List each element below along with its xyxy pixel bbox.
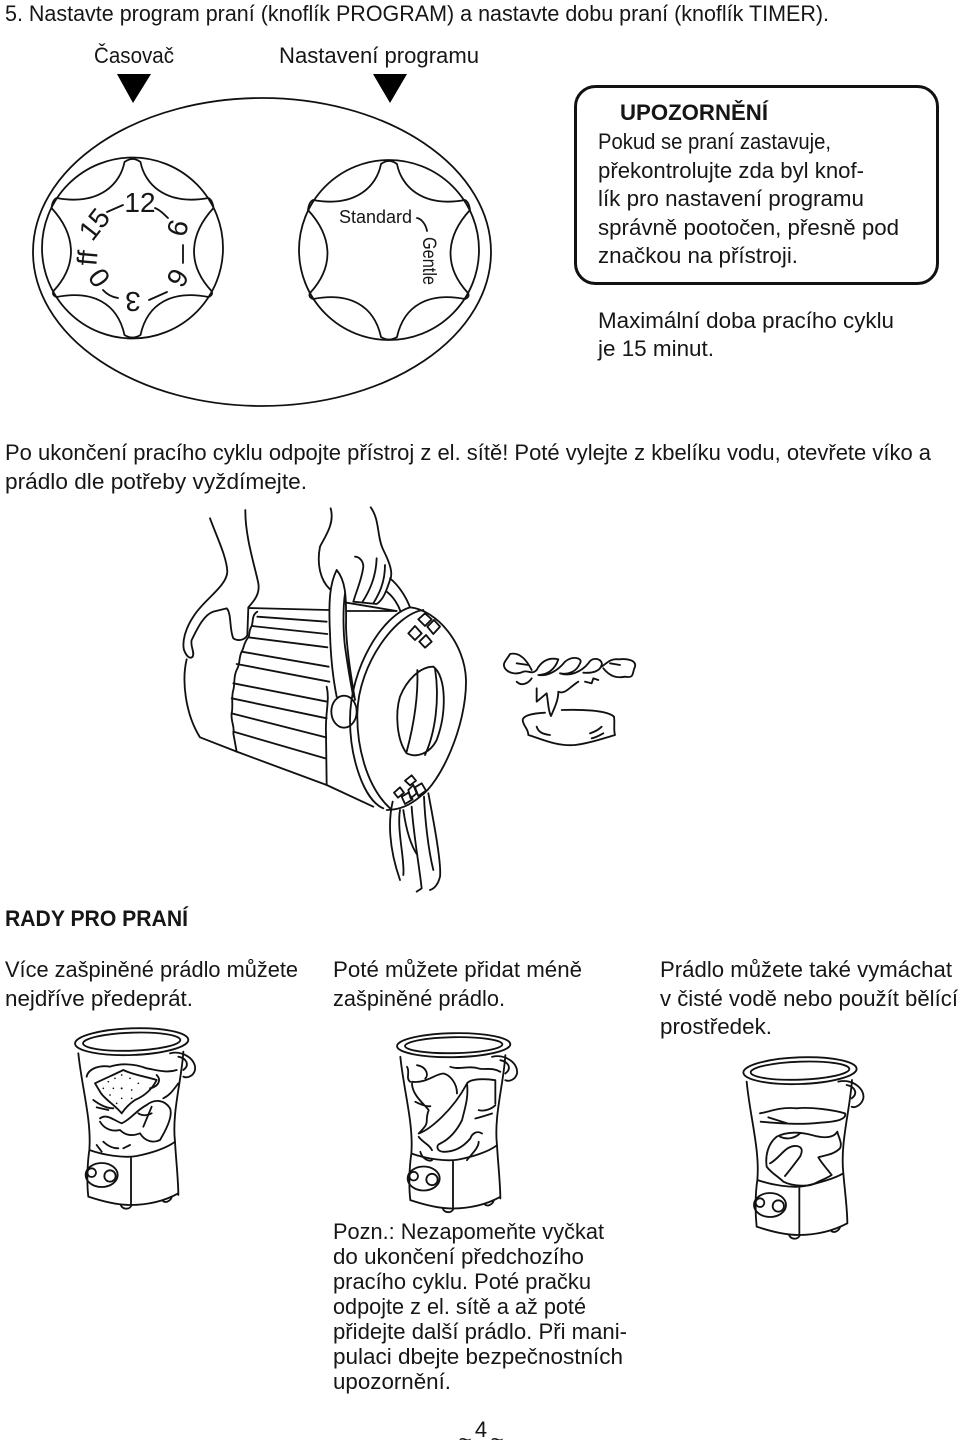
program dial: Standard xyxy=(339,207,412,227)
heading: washing tips: RADY PRO PRANÍ xyxy=(5,906,189,931)
callout body: překontrolujte zda byl knof- xyxy=(598,158,864,183)
instruction after washing xyxy=(5,440,932,494)
tip 1 text: nejdříve předeprát. xyxy=(5,986,193,1011)
illustration: hands emptying the washer xyxy=(183,507,635,892)
tip 3 text: v čisté vodě nebo použít bělící xyxy=(660,986,958,1011)
safety note: odpojte z el. sítě a až poté xyxy=(333,1294,586,1319)
safety note: do ukončení předchozího xyxy=(333,1244,584,1269)
illustration: wrung laundry xyxy=(504,654,635,745)
maximum cycle note: je 15 minut. xyxy=(597,336,714,361)
safety note: Pozn.: Nezapomeňte vyčkat xyxy=(333,1219,604,1244)
program dial: Gentle xyxy=(418,237,439,285)
timer dial: 3 xyxy=(125,286,141,317)
label: timer: Časovač xyxy=(94,43,174,68)
timer dial: 0 xyxy=(82,262,117,293)
safety note: pracího cyklu. Poté pračku xyxy=(333,1269,591,1294)
safety note: upozornění. xyxy=(333,1369,451,1394)
timer dial: 6 xyxy=(160,263,195,292)
arrow: program pointer xyxy=(373,74,407,103)
program dial xyxy=(299,160,479,340)
safety note: přidejte další prádlo. Při mani- xyxy=(333,1319,627,1344)
tip 1 text xyxy=(5,957,298,1011)
timer dial xyxy=(42,158,223,338)
tip 1 text: Více zašpiněné prádlo můžete xyxy=(5,957,298,982)
timer dial: 12 xyxy=(124,187,156,218)
instruction after washing: prádlo dle potřeby vyždímejte. xyxy=(5,469,307,494)
callout body: Pokud se praní zastavuje, xyxy=(598,129,831,154)
illustration: washer rinsing laundry xyxy=(743,1055,863,1239)
illustration: washer with lightly soiled laundry xyxy=(397,1032,517,1212)
callout heading: UPOZORNĚNÍ xyxy=(620,100,769,125)
tip 2 text: Poté můžete přidat méně xyxy=(333,957,582,982)
arrow: timer pointer xyxy=(117,74,151,103)
tip 3 text: Prádlo můžete také vymáchat xyxy=(660,957,952,982)
warning callout xyxy=(576,86,938,284)
illustration: washer with heavily soiled laundry xyxy=(75,1026,195,1209)
safety note xyxy=(333,1219,627,1394)
control panel diagram xyxy=(33,98,491,406)
instruction after washing: Po ukončení pracího cyklu odpojte přístroj z el. sítě! Poté vylejte z kbelíku vodu, otevřete víko a xyxy=(5,440,932,465)
callout body: značkou na přístroji. xyxy=(598,243,798,268)
label: program setting: Nastavení programu xyxy=(279,43,479,68)
timer dial: ff xyxy=(71,249,104,267)
callout body xyxy=(598,129,899,268)
maximum cycle note: Maximální doba pracího cyklu xyxy=(598,308,894,333)
timer dial: 9 xyxy=(161,216,195,239)
page number xyxy=(459,1417,503,1440)
maximum cycle note xyxy=(597,308,894,361)
tip 3 text xyxy=(660,957,958,1039)
step 5 heading: 5. Nastavte program praní (knoflík PROGRAM) a nastavte dobu praní (knoflík TIMER). xyxy=(5,1,829,26)
callout body: správně pootočen, přesně pod xyxy=(598,215,899,240)
callout body: lík pro nastavení programu xyxy=(598,186,864,211)
timer dial: 15 xyxy=(73,202,116,246)
tip 2 text xyxy=(333,957,582,1011)
tip 2 text: zašpiněné prádlo. xyxy=(333,986,505,1011)
safety note: pulaci dbejte bezpečnostních xyxy=(333,1344,623,1369)
tip 3 text: prostředek. xyxy=(660,1014,772,1039)
